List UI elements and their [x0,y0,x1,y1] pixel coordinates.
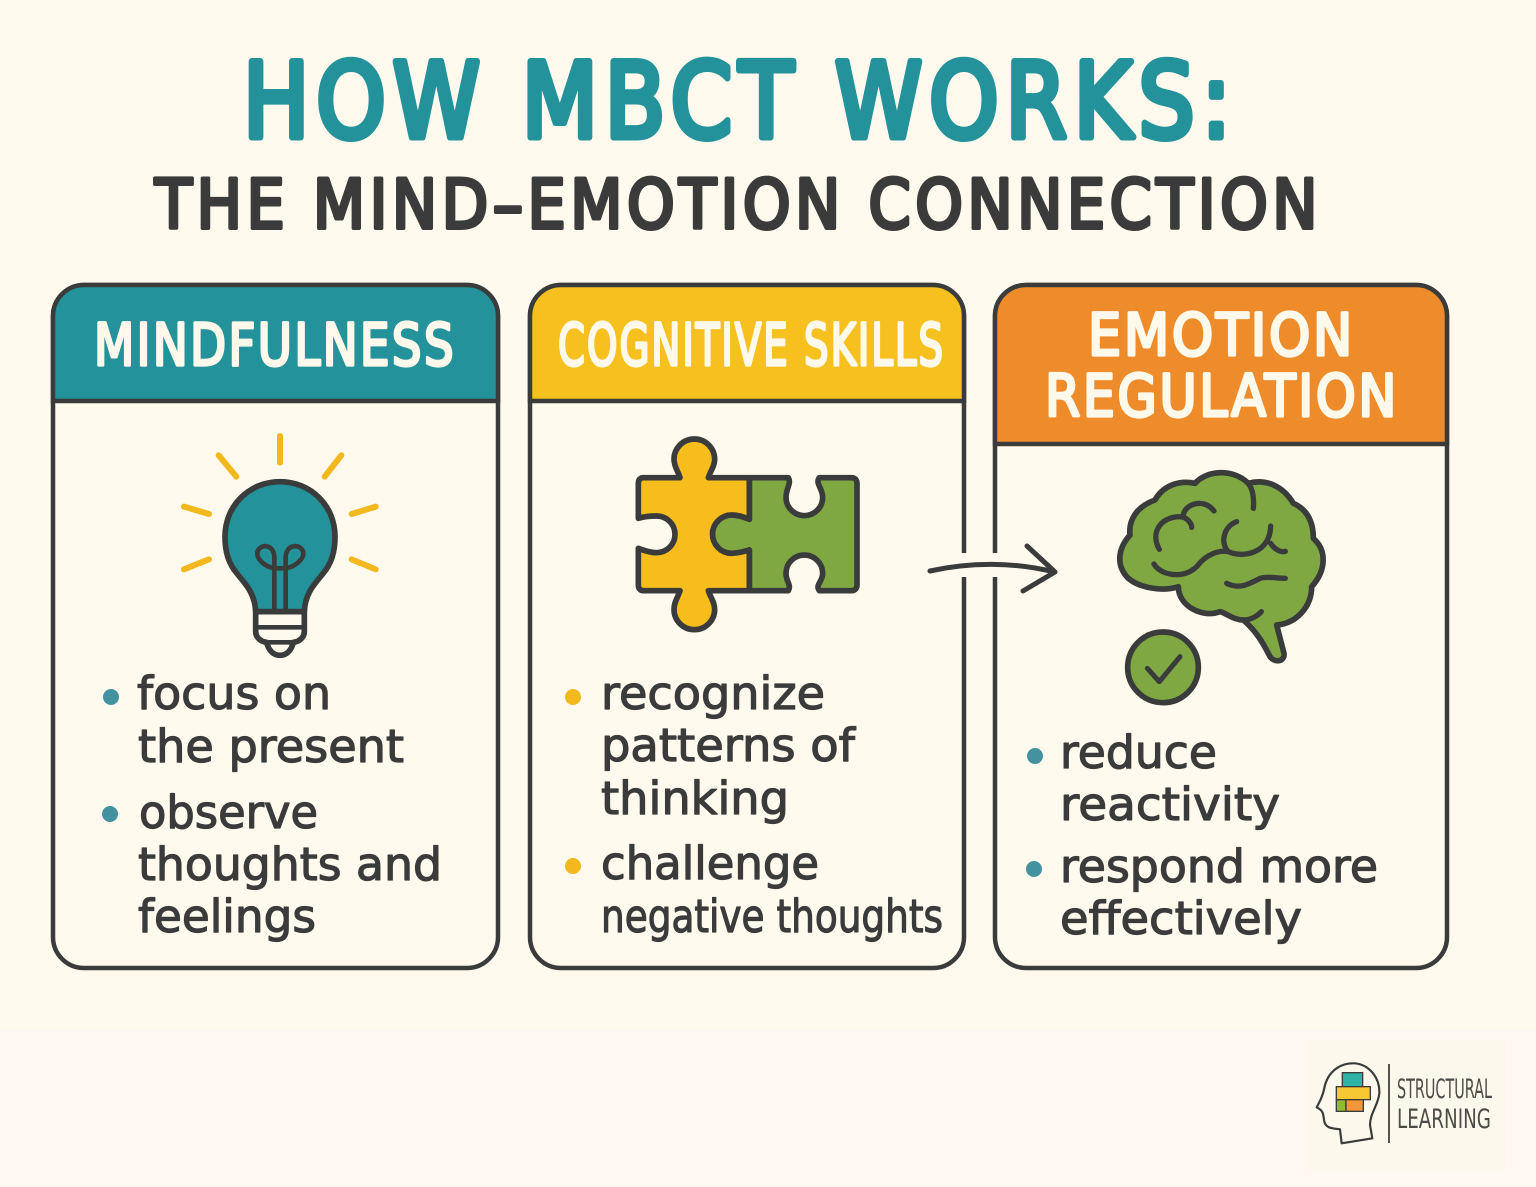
list: mindfulness: focus on [137,667,331,720]
icon: puzzle pieces [638,439,857,630]
list: mindfulness [102,667,442,943]
panel body: mindfulness [53,285,498,968]
list: emotion regulation: reduce [1060,726,1217,779]
icon: light bulb [184,436,376,655]
panel: emotion regulation [995,285,1447,968]
heading: emotion regulation [1045,301,1399,430]
arrow: cognitive skills to emotion regulation [930,546,1055,591]
list: emotion regulation: effectively [1060,892,1302,945]
subtitle: THE MIND–EMOTION CONNECTION [154,166,1322,245]
heading: emotion regulation: EMOTION [1088,301,1355,369]
logo wordmark: LEARNING [1397,1104,1491,1135]
list: cognitive skills: recognize [601,667,825,720]
heading: mindfulness: MINDFULNESS [94,311,456,379]
list: cognitive skills: challenge [601,837,819,890]
heading: cognitive skills: COGNITIVE SKILLS [558,311,945,379]
heading: emotion regulation: REGULATION [1045,362,1399,430]
panel: cognitive skills [530,285,964,968]
panel header: mindfulness [53,285,498,401]
list: mindfulness: the present [138,720,404,773]
list: mindfulness: observe [139,786,318,839]
title: HOW MBCT WORKS: [243,42,1238,162]
icon: brain with check [1120,473,1323,703]
panel header: cognitive skills [530,285,964,401]
logo: structural learning [1307,1040,1505,1171]
panel: mindfulness [53,285,498,968]
list: mindfulness: thoughts and [138,838,442,891]
panel body: cognitive skills [530,285,964,968]
list: cognitive skills: thinking [601,772,789,825]
list: cognitive skills: negative thoughts [601,890,943,943]
panel header: emotion regulation [995,285,1447,444]
logo wordmark [1397,1074,1492,1135]
list: mindfulness: feelings [138,890,316,943]
list: cognitive skills [565,667,943,943]
list: emotion regulation [1026,726,1378,945]
panel body: emotion regulation [995,285,1447,968]
icon: head with blocks [1317,1063,1379,1143]
list: emotion regulation: respond more [1060,840,1378,893]
list: emotion regulation: reactivity [1060,778,1280,831]
list: cognitive skills: patterns of [601,719,856,772]
